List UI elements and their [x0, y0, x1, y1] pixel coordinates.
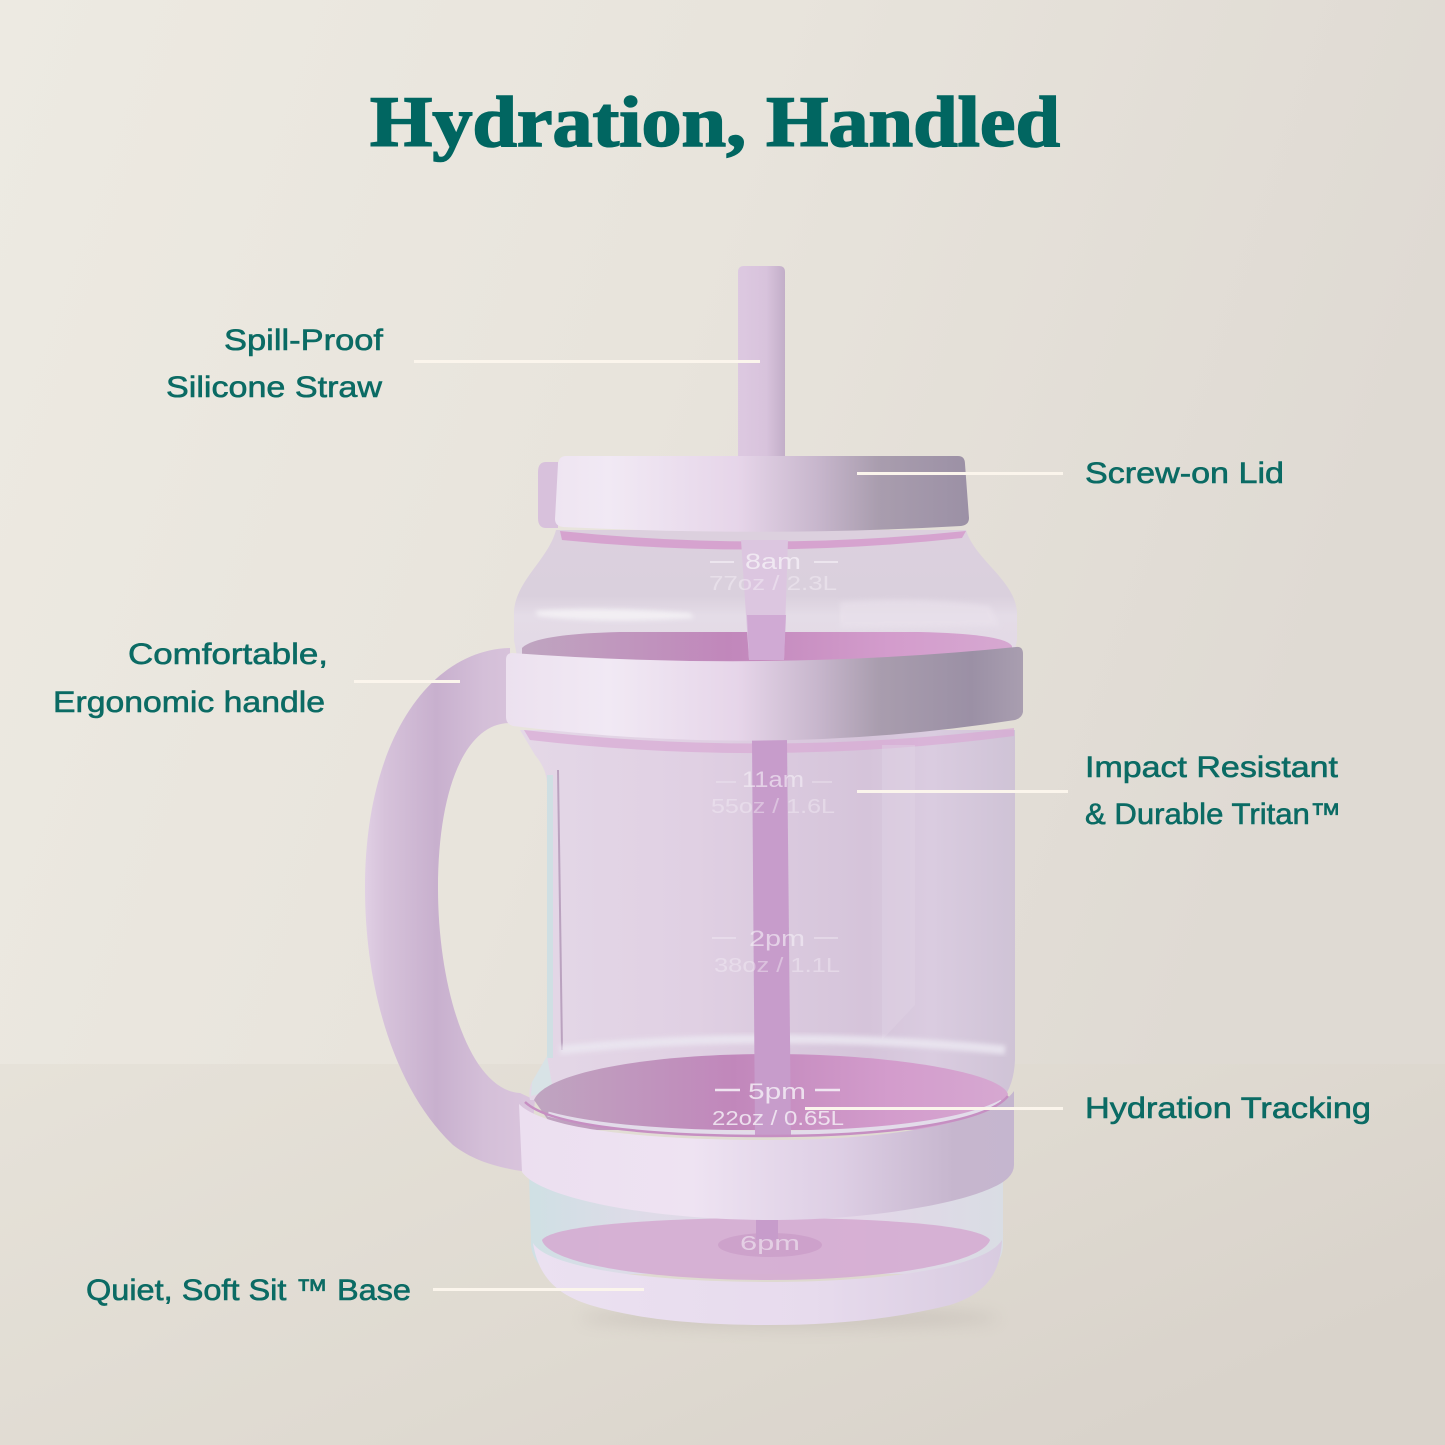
callout: quiet soft sit base: [86, 1274, 644, 1307]
pink rim under upper band: [524, 728, 1014, 753]
2pm marking: 2pm: [749, 926, 805, 951]
handle: [365, 648, 535, 1172]
lower glass body: [520, 728, 1015, 1133]
5pm marking: [712, 1079, 844, 1130]
callout: screw-on lid: [857, 457, 1284, 490]
8am marking: 8am: [745, 549, 801, 574]
label text: & Durable Tritan™: [1085, 798, 1341, 831]
glass base: [529, 1172, 1003, 1280]
label text: Spill-Proof: [224, 324, 384, 357]
11am marking: [711, 767, 835, 818]
leader line: [433, 1288, 644, 1291]
water at bottom of body: [534, 1054, 1008, 1130]
label text: Silicone Straw: [166, 371, 382, 404]
2pm marking: 38oz / 1.1L: [714, 955, 840, 977]
straw above lid: [738, 266, 785, 458]
callout: hydration tracking: [805, 1092, 1371, 1125]
label text: Hydration Tracking: [1085, 1092, 1371, 1125]
neck rim: [560, 531, 966, 550]
5pm marking: 5pm: [748, 1079, 806, 1104]
callout: spill-proof silicone straw: [166, 324, 760, 404]
label text: Comfortable,: [128, 638, 328, 671]
upper handle band: [506, 647, 1023, 741]
label text: Screw-on Lid: [1085, 457, 1284, 490]
label text: Ergonomic handle: [53, 686, 325, 719]
pale sliver at water edge: [548, 1102, 1002, 1133]
band top rim: [525, 1096, 1008, 1136]
pink water in base: [542, 1218, 990, 1280]
hydration tracking markings: [709, 549, 844, 1255]
leader line: [857, 790, 1068, 793]
contact shadow: [580, 1308, 1000, 1328]
light rim above water: [560, 1039, 1005, 1050]
lid tab: [538, 462, 558, 528]
water reflection in shoulder: [522, 632, 1012, 664]
label text: [53, 638, 328, 719]
6pm marking: 6pm: [740, 1233, 800, 1255]
label text: [166, 324, 384, 404]
8am marking: 77oz / 2.3L: [709, 573, 837, 595]
11am marking: 11am: [742, 767, 804, 792]
screw-on lid: [555, 456, 969, 532]
inner straw: [741, 540, 791, 1240]
left glass wall: [547, 775, 553, 1058]
background floor: [0, 1064, 1445, 1445]
product illustration: pitcher: [365, 266, 1023, 1328]
leader line: [414, 360, 760, 363]
leader line: [354, 680, 460, 683]
callout: impact resistant tritan: [857, 751, 1341, 831]
11am marking: 55oz / 1.6L: [711, 796, 835, 818]
title: Hydration, Handled: [370, 82, 1060, 162]
leader line: [857, 472, 1063, 475]
5pm marking: 22oz / 0.65L: [712, 1108, 844, 1130]
background wall: [0, 0, 1445, 1066]
leader line: [805, 1107, 1063, 1110]
8am marking: [709, 549, 838, 595]
callout: ergonomic handle: [53, 638, 460, 719]
upper glass shoulder: [514, 530, 1017, 664]
label text: Quiet, Soft Sit ™ Base: [86, 1274, 411, 1307]
2pm marking: [712, 926, 840, 977]
soft silicone base: [533, 1240, 1002, 1325]
label text: [1085, 751, 1341, 831]
lower base band: [519, 1091, 1014, 1220]
label text: Impact Resistant: [1085, 751, 1339, 784]
